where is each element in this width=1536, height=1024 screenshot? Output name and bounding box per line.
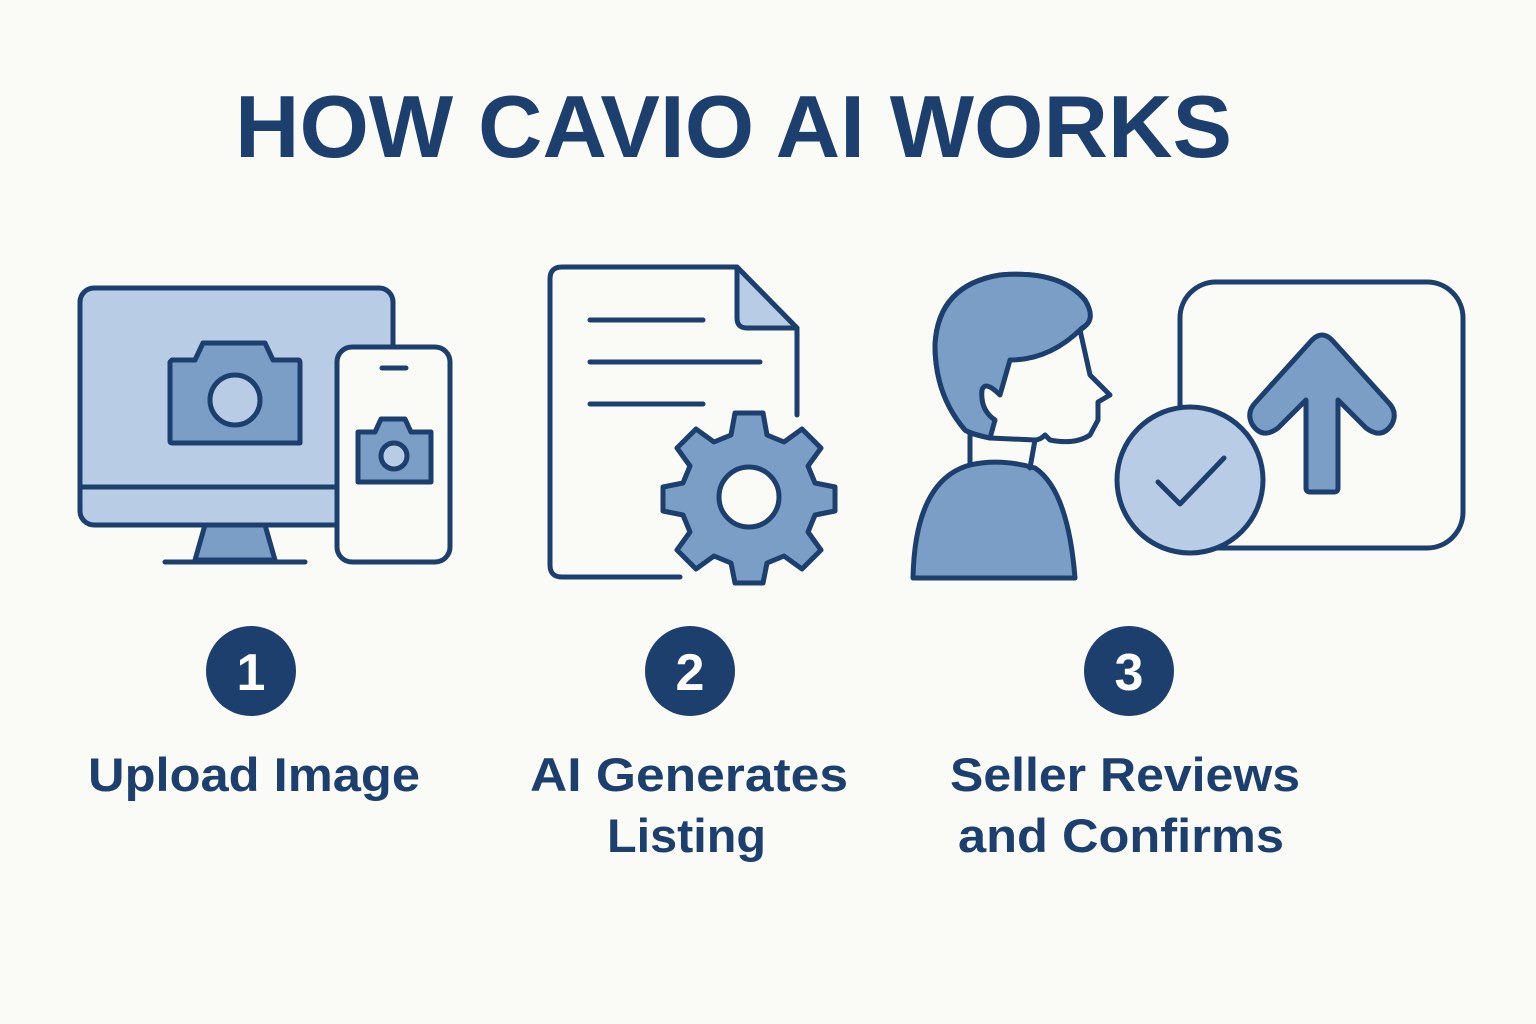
label: ai generates listing: Listing	[607, 809, 766, 862]
label: seller reviews and confirms: Seller Reviews	[950, 748, 1300, 801]
title: HOW CAVIO AI WORKS	[235, 77, 1232, 176]
step 3 number: 3	[1115, 644, 1143, 702]
step 2 number	[645, 626, 735, 716]
icon: monitor and phone upload	[80, 288, 450, 562]
label: upload image: Upload Image	[88, 748, 420, 801]
label: ai generates listing	[530, 748, 848, 862]
label: seller reviews and confirms	[950, 748, 1300, 862]
step 1 number: 1	[237, 644, 265, 702]
icon: document with gear	[550, 267, 835, 583]
step 3 number	[1084, 626, 1174, 716]
icon: seller reviews and confirms	[913, 274, 1463, 578]
label: seller reviews and confirms: and Confirms	[958, 809, 1284, 862]
label: ai generates listing: AI Generates	[530, 748, 848, 801]
step 1 number	[206, 626, 296, 716]
step 2 number: 2	[676, 644, 704, 702]
